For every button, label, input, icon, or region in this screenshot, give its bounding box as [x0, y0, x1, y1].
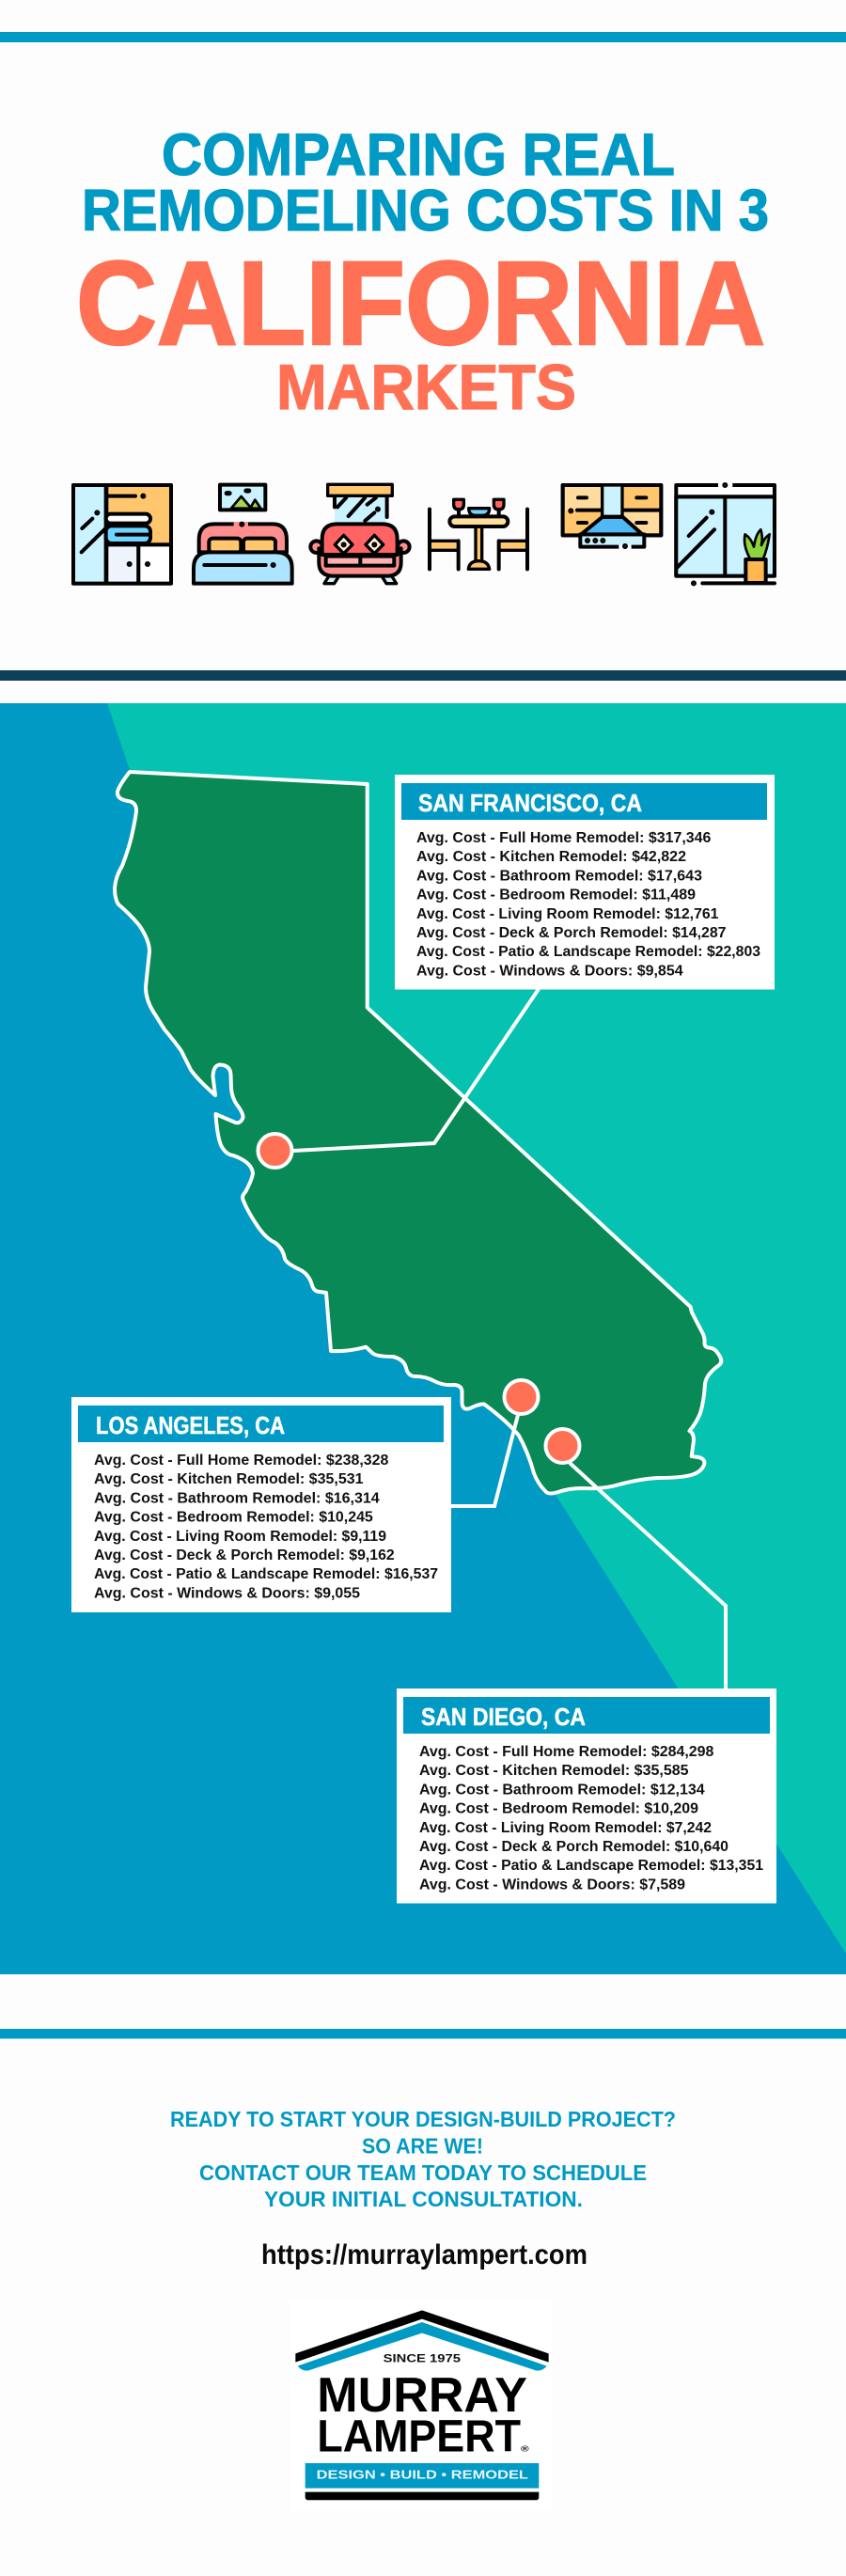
title: CALIFORNIA	[76, 237, 765, 369]
panel: San Diego costs	[397, 1689, 776, 1903]
land background	[107, 703, 846, 1954]
marker: Los Angeles	[504, 1380, 538, 1414]
panel: San Diego costs: Avg. Cost - Patio & Landscape Remodel: $13,351	[419, 1858, 763, 1874]
website url: https://murraylampert.com	[261, 2239, 588, 2270]
panel: Los Angeles costs: Avg. Cost - Bathroom Remodel: $16,314	[94, 1490, 380, 1506]
panel: San Diego costs: Avg. Cost - Full Home Remodel: $284,298	[419, 1744, 714, 1760]
panel: San Francisco costs: SAN FRANCISCO, CA	[418, 789, 642, 817]
connector: Los Angeles	[449, 1415, 518, 1506]
panel: Los Angeles costs: LOS ANGELES, CA	[96, 1411, 285, 1439]
panel: San Diego costs: Avg. Cost - Bedroom Remodel: $10,209	[419, 1801, 698, 1817]
title: REMODELING COSTS IN 3	[82, 179, 769, 243]
panel: San Diego costs: Avg. Cost - Kitchen Remodel: $35,585	[419, 1763, 689, 1779]
panel: California map	[0, 703, 846, 1974]
panel: San Diego costs: Avg. Cost - Deck & Porch Remodel: $10,640	[419, 1839, 728, 1855]
call to action: SO ARE WE!	[362, 2134, 483, 2159]
icon: dining table	[430, 499, 527, 569]
logo: Murray Lampert: DESIGN • BUILD • REMODEL	[317, 2469, 528, 2482]
panel: San Francisco costs: Avg. Cost - Windows & Doors: $9,854	[416, 963, 683, 979]
icon: wardrobe	[73, 485, 171, 584]
panel: San Francisco costs: Avg. Cost - Patio & Landscape Remodel: $22,803	[416, 944, 760, 960]
title: MARKETS	[276, 352, 576, 423]
panel: San Diego costs: Avg. Cost - Bathroom Remodel: $12,134	[419, 1782, 705, 1798]
logo: Murray Lampert: SINCE 1975	[384, 2352, 461, 2365]
logo: Murray Lampert: ®	[521, 2443, 529, 2453]
logo: Murray Lampert	[290, 2301, 553, 2511]
call to action: YOUR INITIAL CONSULTATION.	[264, 2187, 583, 2211]
panel: Los Angeles costs: Avg. Cost - Living Room Remodel: $9,119	[94, 1529, 386, 1545]
panel: San Diego costs: Avg. Cost - Windows & Doors: $7,589	[419, 1877, 685, 1893]
ocean background	[0, 703, 846, 1974]
panel: San Francisco costs: Avg. Cost - Deck & Porch Remodel: $14,287	[416, 925, 727, 941]
icon row: rooms	[73, 482, 775, 584]
connector: San Diego	[570, 1463, 726, 1689]
panel: Los Angeles costs: Avg. Cost - Kitchen Remodel: $35,531	[94, 1471, 364, 1487]
marker: San Francisco	[258, 1134, 291, 1168]
marker: San Diego	[545, 1429, 579, 1463]
icon: bed	[194, 485, 292, 584]
panel: San Francisco costs	[395, 775, 775, 989]
title: COMPARING REAL	[162, 122, 675, 188]
panel: San Diego costs: Avg. Cost - Living Room Remodel: $7,242	[419, 1820, 712, 1836]
logo: Murray Lampert: MURRAY	[317, 2368, 527, 2423]
connector: San Francisco	[293, 989, 539, 1151]
panel: San Francisco costs: Avg. Cost - Bedroom Remodel: $11,489	[416, 887, 696, 903]
panel: San Francisco costs: Avg. Cost - Full Home Remodel: $317,346	[416, 830, 712, 846]
call to action	[170, 2107, 676, 2211]
panel: San Francisco costs: Avg. Cost - Kitchen Remodel: $42,822	[416, 849, 686, 865]
panel: Los Angeles costs: Avg. Cost - Full Home Remodel: $238,328	[94, 1453, 389, 1469]
panel: Los Angeles costs: Avg. Cost - Patio & Landscape Remodel: $16,537	[94, 1566, 438, 1582]
icon: range hood	[563, 485, 661, 549]
panel: Los Angeles costs: Avg. Cost - Windows & Doors: $9,055	[94, 1585, 360, 1601]
panel: Los Angeles costs: Avg. Cost - Bedroom Remodel: $10,245	[94, 1510, 373, 1526]
panel: Los Angeles costs: Avg. Cost - Deck & Porch Remodel: $9,162	[94, 1547, 395, 1563]
panel: San Francisco costs: Avg. Cost - Bathroom Remodel: $17,643	[416, 868, 702, 884]
call to action: READY TO START YOUR DESIGN-BUILD PROJECT?	[170, 2107, 676, 2131]
title	[76, 122, 769, 423]
panel: Los Angeles costs	[71, 1397, 451, 1612]
icon: window and plant	[676, 482, 775, 584]
call to action: CONTACT OUR TEAM TODAY TO SCHEDULE	[199, 2160, 647, 2185]
icon: sofa	[310, 484, 410, 584]
map: California outline	[115, 772, 721, 1493]
panel: San Francisco costs: Avg. Cost - Living Room Remodel: $12,761	[416, 906, 719, 922]
logo: Murray Lampert: LAMPERT	[317, 2411, 521, 2462]
panel: San Diego costs: SAN DIEGO, CA	[421, 1703, 586, 1731]
